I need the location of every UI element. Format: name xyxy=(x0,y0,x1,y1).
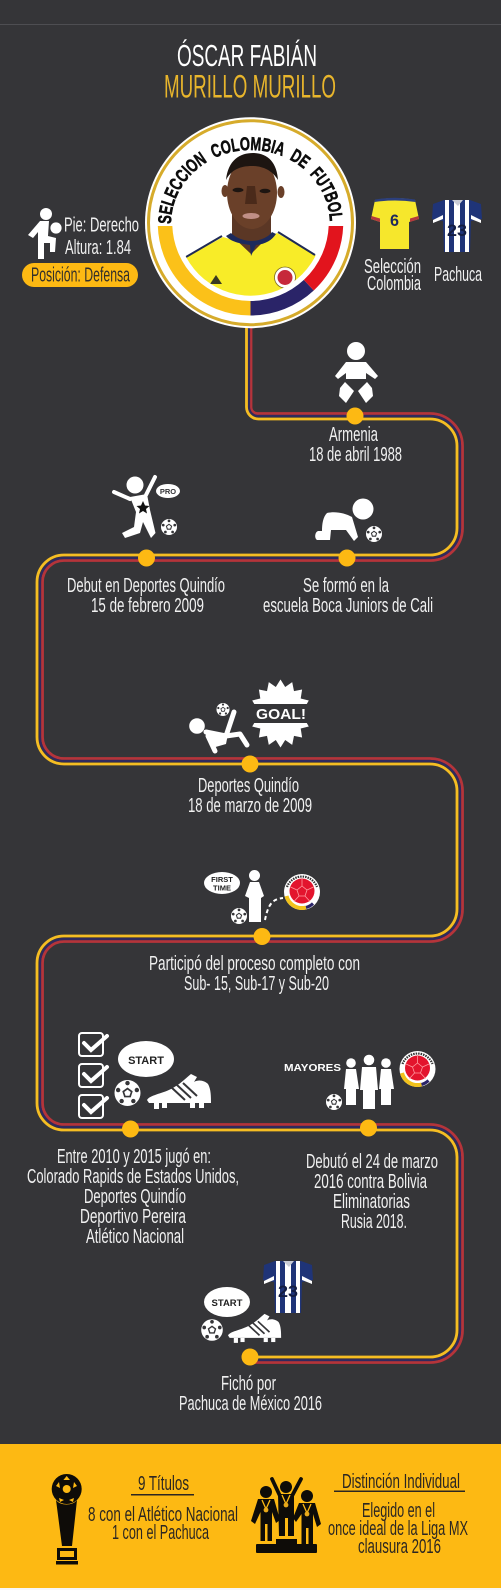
label: Selección Colombia: Selección xyxy=(364,256,421,278)
player portrait xyxy=(186,153,316,296)
individual distinction text: Elegido en el xyxy=(362,1500,435,1522)
jersey: Pachuca xyxy=(432,200,482,252)
icon: pro player xyxy=(114,476,180,538)
icon: podium with medal winners xyxy=(251,1479,321,1553)
label: Selección Colombia: Colombia xyxy=(367,273,422,295)
titles text: 9 Títulos xyxy=(138,1473,189,1495)
icon: Pachuca jersey with boot: START xyxy=(212,1298,243,1309)
titles text xyxy=(88,1473,238,1544)
panel: honours band xyxy=(0,1444,501,1590)
icon: start bubble, ball and boot xyxy=(114,1041,211,1109)
milestone: Debut mayores: Rusia 2018. xyxy=(341,1211,407,1233)
individual distinction text: clausura 2016 xyxy=(358,1536,441,1558)
jersey: Selección Colombia: 6 xyxy=(390,211,399,230)
milestone: Deportes Quindío goal xyxy=(188,680,314,817)
milestone: Deportes Quindío goal: 18 de marzo de 2009 xyxy=(188,795,312,817)
player profile xyxy=(22,208,139,287)
icon: crawling baby xyxy=(315,498,382,542)
icon: bicycle kick xyxy=(189,703,247,751)
milestone: Sub-15 Sub-17 Sub-20 xyxy=(149,870,360,995)
timeline path xyxy=(37,325,462,1362)
milestone: Boca Juniors de Cali: Se formó en la xyxy=(303,575,390,597)
milestone: Debut en Deportes Quindío xyxy=(67,476,225,617)
player profile: Altura: 1.84 xyxy=(65,237,131,259)
icon: start bubble, ball and boot: START xyxy=(128,1055,164,1067)
milestone: clubs 2010 to 2015 xyxy=(27,1033,239,1248)
icon: Pachuca jersey with boot xyxy=(201,1261,313,1343)
icon: first time call-up: FIRST xyxy=(211,875,233,884)
icon: pro player: PRO xyxy=(160,487,176,496)
milestone: Debut mayores xyxy=(284,1051,438,1233)
icon: baby xyxy=(335,342,378,403)
titles text: 8 con el Atlético Nacional xyxy=(88,1504,238,1526)
icon: first time call-up xyxy=(204,870,320,924)
milestone: Debut mayores: 2016 contra Bolivia xyxy=(314,1171,428,1193)
title xyxy=(164,38,336,104)
icon: goal burst: GOAL! xyxy=(256,706,306,723)
badge: player portrait crest xyxy=(145,117,356,328)
icon: first time call-up: TIME xyxy=(213,884,231,892)
badge lettering: SELECCION COLOMBIA DE FUTBOL xyxy=(158,136,342,224)
milestone: Sub-15 Sub-17 Sub-20: Participó del proceso completo con xyxy=(149,953,360,975)
milestone: Debut en Deportes Quindío: Debut en Deportes Quindío xyxy=(67,575,225,597)
title: MURILLO MURILLO xyxy=(164,68,336,104)
milestone: Pachuca 2016 xyxy=(179,1261,322,1415)
milestone: Debut en Deportes Quindío: 15 de febrero 2009 xyxy=(91,595,204,617)
milestone: clubs 2010 to 2015: Deportivo Pereira xyxy=(80,1206,187,1228)
milestone: Pachuca 2016: Fichó por xyxy=(221,1373,276,1395)
jersey: Selección Colombia xyxy=(371,198,419,249)
icon: player juggling ball xyxy=(28,208,62,259)
milestone: clubs 2010 to 2015: Entre 2010 y 2015 jugó en: xyxy=(57,1146,211,1168)
title: ÓSCAR FABIÁN xyxy=(177,38,317,73)
milestone: Sub-15 Sub-17 Sub-20: Sub- 15, Sub-17 y Sub-20 xyxy=(184,973,329,995)
milestone: Armenia xyxy=(309,342,402,466)
label: Selección Colombia xyxy=(364,256,422,295)
milestone: clubs 2010 to 2015: Atlético Nacional xyxy=(86,1226,184,1248)
icon: trophy xyxy=(52,1474,82,1564)
icon: checklist xyxy=(79,1033,107,1118)
milestone: Boca Juniors de Cali xyxy=(263,498,433,617)
milestone: Deportes Quindío goal: Deportes Quindío xyxy=(198,775,299,797)
icon: senior team xyxy=(284,1051,436,1110)
foot and height: Pie: Derecho xyxy=(64,214,139,236)
milestone: Pachuca 2016: Pachuca de México 2016 xyxy=(179,1393,322,1415)
milestone: clubs 2010 to 2015: Colorado Rapids de Estados Unidos, xyxy=(27,1166,239,1188)
milestone: clubs 2010 to 2015: Deportes Quindío xyxy=(84,1186,186,1208)
milestone: Armenia: Armenia xyxy=(329,424,379,446)
position pill: Posición: Defensa xyxy=(31,264,131,286)
milestone: Debut mayores: Eliminatorias xyxy=(333,1191,410,1213)
titles text: 1 con el Pachuca xyxy=(112,1522,210,1544)
individual distinction text xyxy=(328,1471,468,1558)
tricolor arc xyxy=(165,223,336,308)
icon: senior team: MAYORES xyxy=(284,1062,341,1074)
milestone: Armenia: 18 de abril 1988 xyxy=(309,444,402,466)
